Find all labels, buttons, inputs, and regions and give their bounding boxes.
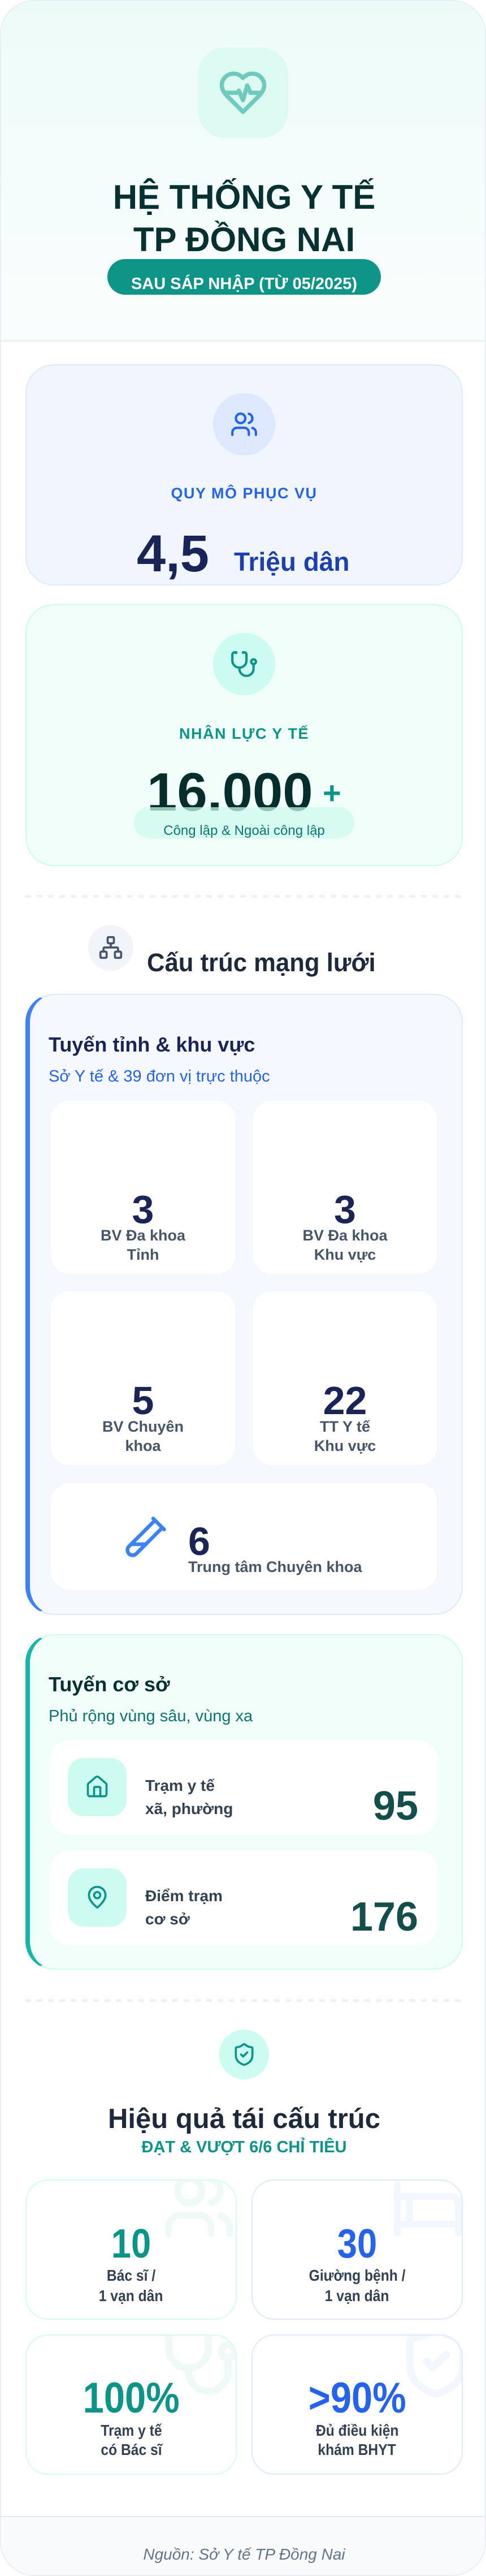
stat: BV Đa khoa Khu vực	[252, 1100, 438, 1275]
icon: stethoscope	[213, 633, 275, 695]
stat row: Trạm y tế xã, phường: Trạm y tế	[145, 1777, 215, 1794]
subtitle pill	[107, 259, 381, 295]
stat: BV Đa khoa Tỉnh	[50, 1100, 236, 1275]
panel title: Tuyến cơ sở	[49, 1673, 170, 1696]
stat: Trung tâm Chuyên khoa: 6	[188, 1519, 210, 1563]
card: doctors per 10k: Bác sĩ /	[107, 2267, 155, 2284]
stat row: Trạm y tế xã, phường: xã, phường	[145, 1800, 233, 1817]
panel subtitle: Sở Y tế & 39 đơn vị trực thuộc	[49, 1067, 270, 1085]
value: 16.000	[147, 762, 313, 822]
stat: TT Y tế Khu vực	[252, 1290, 438, 1466]
stat row: Điểm trạm cơ sở: Điểm trạm	[145, 1887, 223, 1905]
icon: users	[213, 393, 275, 455]
icon: shield check	[219, 2030, 269, 2079]
icon: network	[88, 925, 133, 971]
value	[137, 525, 349, 583]
panel: grassroots level	[25, 1634, 463, 1970]
icon: map pin	[68, 1868, 127, 1927]
card: stations with doctors: Trạm y tế	[101, 2422, 162, 2439]
panel: workforce	[25, 604, 463, 866]
stat: Trung tâm Chuyên khoa	[50, 1482, 438, 1591]
card: BHYT eligible	[251, 2334, 463, 2475]
stat row: Điểm trạm cơ sở	[50, 1850, 438, 1945]
title: TP ĐỒNG NAI	[133, 221, 355, 259]
stat: BV Đa khoa Khu vực: BV Đa khoa	[302, 1227, 388, 1244]
card: BHYT eligible: >90%	[309, 2374, 406, 2422]
subtitle pill: SAU SÁP NHẬP (TỪ 05/2025)	[131, 275, 357, 293]
stat: TT Y tế Khu vực: 22	[323, 1379, 367, 1423]
stat: BV Đa khoa Tỉnh: Tỉnh	[127, 1246, 159, 1263]
panel: population	[25, 364, 463, 585]
card: doctors per 10k: 1 vạn dân	[99, 2287, 163, 2304]
icon: house	[68, 1758, 127, 1816]
section heading: results: Hiệu quả tái cấu trúc	[108, 2104, 380, 2134]
label: QUY MÔ PHỤC VỤ	[171, 485, 318, 502]
value: +	[323, 775, 341, 811]
label: NHÂN LỰC Y TẾ	[179, 725, 309, 742]
stat row: Trạm y tế xã, phường	[50, 1740, 438, 1835]
stat row: Trạm y tế xã, phường: 95	[373, 1784, 418, 1829]
stat row: Điểm trạm cơ sở: cơ sở	[145, 1910, 190, 1928]
stat: BV Đa khoa Khu vực: 3	[334, 1187, 356, 1231]
stat: TT Y tế Khu vực: Khu vực	[314, 1437, 376, 1454]
card: stations with doctors	[25, 2334, 237, 2475]
section heading: results: ĐẠT & VƯỢT 6/6 CHỈ TIÊU	[141, 2138, 347, 2156]
stat row: Điểm trạm cơ sở: 176	[350, 1894, 418, 1940]
icon: test tube	[125, 1517, 166, 1557]
stat: BV Đa khoa Tỉnh: 3	[132, 1187, 154, 1231]
card: doctors per 10k: 10	[111, 2221, 151, 2267]
footer: source	[1, 2516, 486, 2576]
card: beds per 10k: 30	[337, 2221, 377, 2267]
stat: TT Y tế Khu vực: TT Y tế	[320, 1418, 370, 1435]
title: HỆ THỐNG Y TẾ	[113, 178, 375, 216]
stat: BV Chuyên khoa: 5	[132, 1379, 154, 1423]
stat: BV Chuyên khoa	[50, 1290, 236, 1466]
panel subtitle: Phủ rộng vùng sâu, vùng xa	[49, 1707, 253, 1725]
stat: Trung tâm Chuyên khoa: Trung tâm Chuyên khoa	[188, 1558, 362, 1575]
header	[1, 1, 486, 342]
card: BHYT eligible: khám BHYT	[318, 2441, 396, 2458]
card: beds per 10k: Giường bệnh /	[309, 2267, 405, 2284]
card: beds per 10k	[251, 2179, 463, 2320]
section heading: results	[108, 2104, 380, 2156]
title	[113, 178, 375, 259]
card: stations with doctors: 100%	[83, 2374, 180, 2422]
section heading: network structure: Cấu trúc mạng lưới	[147, 948, 376, 977]
card: stations with doctors: có Bác sĩ	[101, 2441, 162, 2458]
section heading: network structure	[88, 925, 376, 977]
stat: BV Chuyên khoa: BV Chuyên	[102, 1418, 184, 1435]
stat: BV Đa khoa Tỉnh: BV Đa khoa	[101, 1227, 185, 1244]
stat: BV Chuyên khoa: khoa	[125, 1437, 161, 1454]
card: beds per 10k: 1 vạn dân	[325, 2287, 389, 2304]
value: 4,5	[137, 525, 209, 583]
card: doctors per 10k	[25, 2179, 237, 2320]
card: BHYT eligible: Đủ điều kiện	[316, 2422, 398, 2439]
panel title: Tuyến tỉnh & khu vực	[49, 1033, 255, 1056]
caption pill	[134, 807, 354, 838]
stat: BV Đa khoa Khu vực: Khu vực	[314, 1246, 376, 1263]
panel: provincial level	[25, 994, 463, 1615]
value: Triệu dân	[234, 547, 349, 576]
footer: source: Nguồn: Sở Y tế TP Đồng Nai	[143, 2545, 345, 2563]
caption pill: Công lập & Ngoài công lập	[163, 823, 325, 838]
icon: heart pulse	[198, 48, 288, 138]
